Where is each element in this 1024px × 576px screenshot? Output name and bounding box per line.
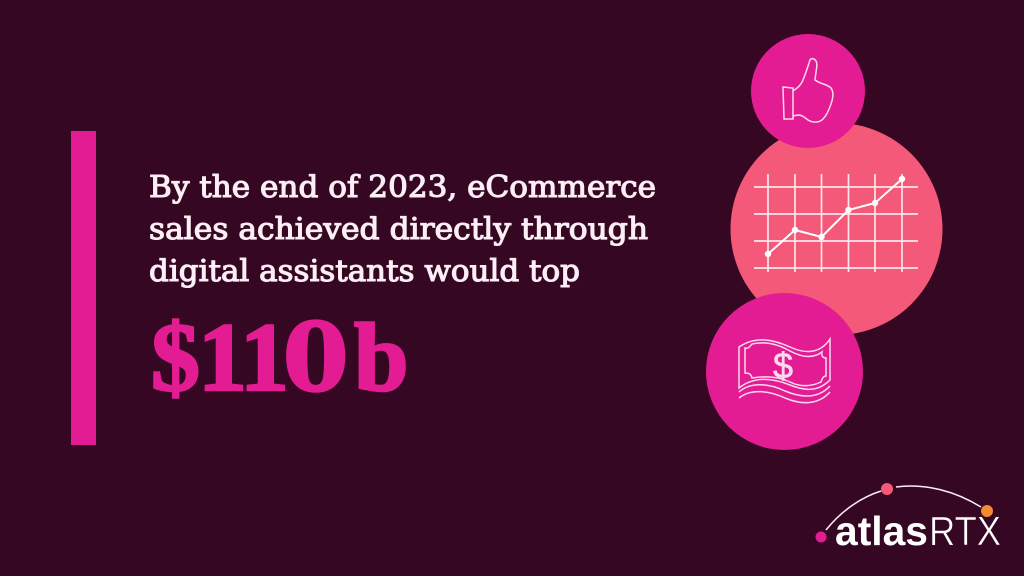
big number: 0 (283, 303, 348, 413)
logo: atlasRTX (816, 483, 1001, 554)
dollar sign: $ (773, 345, 793, 386)
headline text: digital assistants would top (149, 254, 580, 288)
icon: thumbs up circle (751, 34, 865, 148)
big number: b (354, 304, 409, 412)
headline text (149, 170, 656, 288)
headline text: sales achieved directly through (149, 212, 648, 246)
headline text: By the end of 2023, eCommerce (149, 170, 656, 204)
logo: atlasRTX: RTX (929, 508, 1001, 554)
icon: line chart circle (730, 123, 942, 335)
accent bar (71, 131, 96, 445)
icon: money circle (706, 293, 863, 450)
logo: atlasRTX: atlas (835, 508, 928, 554)
big number: $11 (151, 304, 289, 412)
